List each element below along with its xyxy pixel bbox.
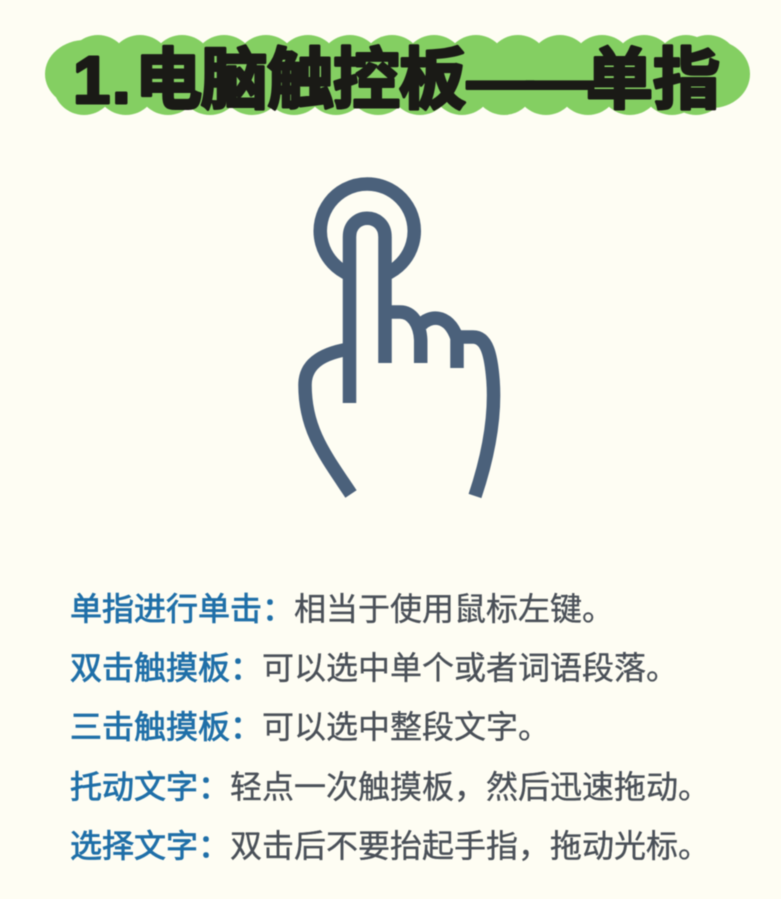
title text: 1.电脑触控板——单指 (73, 43, 720, 118)
line: select text: 选择文字：双击后不要抬起手指，拖动光标。 (70, 828, 710, 864)
thumb and palm (305, 349, 351, 494)
line: triple tap: 三击触摸板：可以选中整段文字。 (70, 709, 550, 745)
knuckles (385, 312, 421, 363)
touch ring (320, 184, 414, 274)
index finger (350, 218, 385, 403)
title banner (44, 34, 751, 118)
line: double tap: 双击触摸板：可以选中单个或者词语段落。 (70, 650, 678, 686)
icon: hand tapping with one finger (298, 176, 502, 499)
line: single tap: 单指进行单击：相当于使用鼠标左键。 (70, 591, 614, 627)
line: drag text: 托动文字：轻点一次触摸板，然后迅速拖动。 (70, 769, 710, 805)
green scalloped cloud background (45, 35, 750, 115)
text block: single finger gestures (70, 591, 710, 864)
